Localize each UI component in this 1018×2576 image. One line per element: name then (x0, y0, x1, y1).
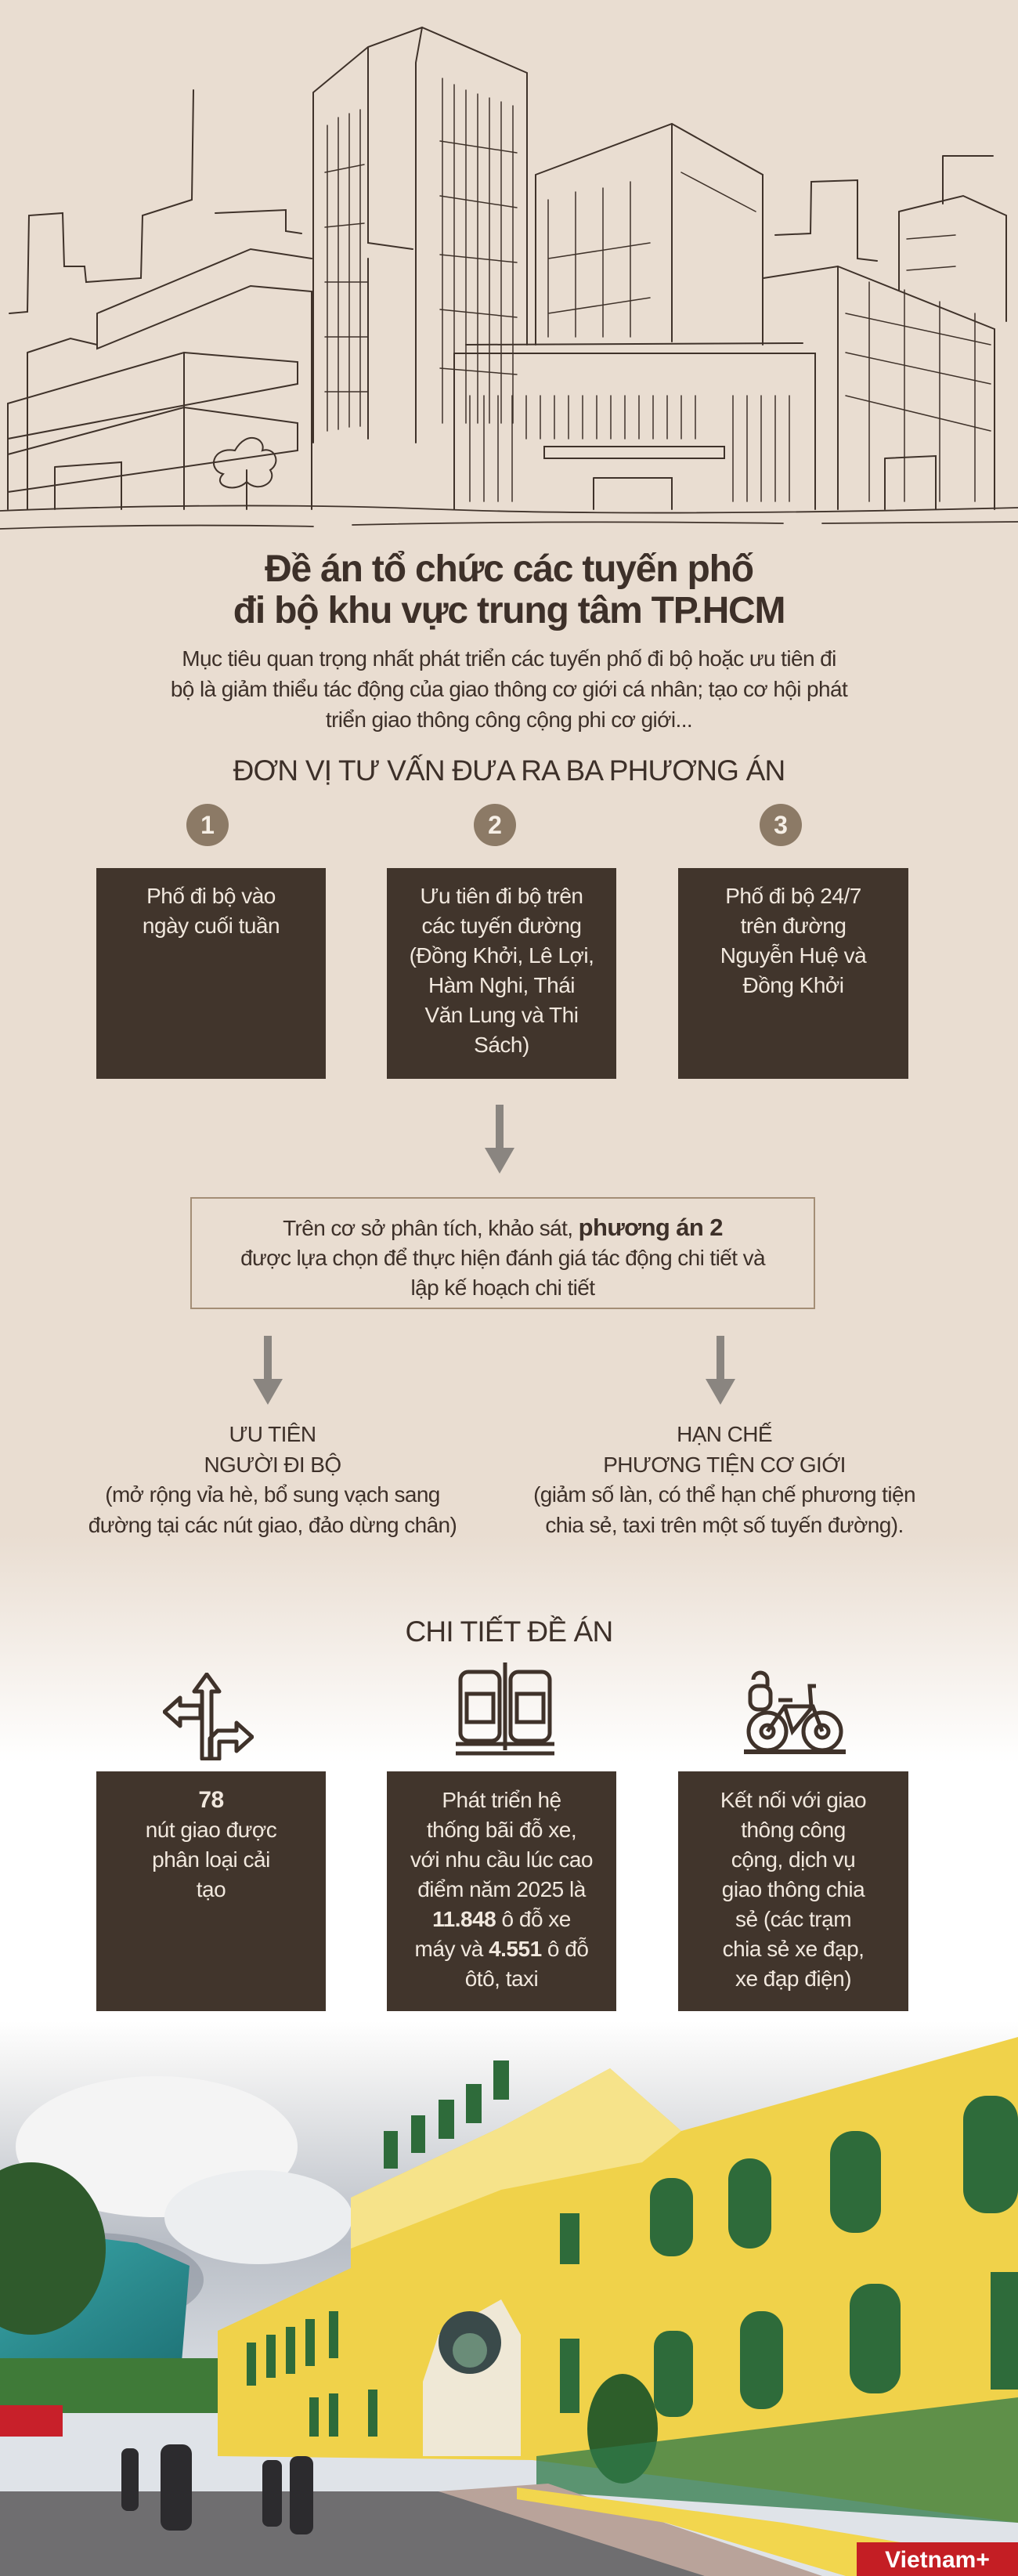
ground lines (0, 505, 1018, 529)
arrow down left (253, 1336, 283, 1405)
text: restrict vehicles: (giảm số làn, có thể hạn chế phương tiện (533, 1482, 915, 1507)
low front building (454, 343, 815, 509)
option box 3: Nguyễn Huệ và (720, 943, 866, 968)
detail box 2: với nhu cầu lúc cao (410, 1847, 593, 1872)
option box 2: Sách) (474, 1033, 529, 1057)
decision box: được lựa chọn để thực hiện đánh giá tác động chi tiết và (240, 1246, 765, 1270)
detail box 3: thông công (741, 1818, 846, 1842)
intro text: Mục tiêu quan trọng nhất phát triển các tuyến phố đi bộ hoặc ưu tiên đi (182, 646, 836, 671)
detail box 2: 11.848 ô đỗ xe (432, 1907, 571, 1931)
number 2: 2 (488, 811, 502, 839)
text: restrict vehicles: PHƯƠNG TIỆN CƠ GIỚI (603, 1453, 846, 1476)
yellow building (218, 2037, 1018, 2523)
option box 3: trên đường (741, 914, 846, 938)
detail box 1: 78 (198, 1787, 224, 1813)
title: đi bộ khu vực trung tâm TP.HCM (233, 590, 785, 631)
option box 2: Văn Lung và Thi (425, 1003, 578, 1027)
icon: parking cars (456, 1662, 554, 1755)
intro text: triển giao thông công cộng phi cơ giới... (326, 707, 692, 732)
text: restrict vehicles: chia sẻ, taxi trên một số tuyến đường). (545, 1512, 904, 1537)
number 2 (474, 804, 516, 846)
detail box 3 (678, 1771, 908, 2011)
option box 2: các tuyến đường (422, 914, 581, 938)
intro text: bộ là giảm thiểu tác động của giao thông cơ giới cá nhân; tạo cơ hội phát (171, 677, 847, 701)
detail box 3: xe đạp điện) (735, 1966, 851, 1991)
text: prioritize pedestrians: đường tại các nút giao, đảo dừng chân) (88, 1512, 457, 1537)
detail box 2: điểm năm 2025 là (417, 1877, 586, 1901)
windows (247, 2060, 1018, 2437)
logo: Vietnam+: Vietnam+ (885, 2547, 990, 2573)
text: restrict vehicles (533, 1422, 915, 1537)
arrow down right (706, 1336, 735, 1405)
option box 3 (678, 868, 908, 1079)
detail box 1: nút giao được (146, 1818, 276, 1842)
detail box 3: Kết nối với giao (720, 1788, 866, 1812)
icon: bicycle with lock (744, 1670, 846, 1754)
text: restrict vehicles: HẠN CHẾ (677, 1422, 772, 1446)
decision box: lập kế hoạch chi tiết (411, 1275, 594, 1300)
option box 2 (387, 868, 616, 1079)
people (121, 2444, 313, 2534)
option box 1 (96, 868, 326, 1079)
text: prioritize pedestrians (88, 1422, 457, 1537)
option box 1: ngày cuối tuần (143, 914, 280, 938)
glass tower (0, 2237, 190, 2362)
background skyline (9, 90, 301, 313)
detail box 1: tạo (197, 1877, 226, 1901)
option box 3: Phố đi bộ 24/7 (725, 884, 861, 908)
detail box 1 (96, 1771, 326, 2011)
number 3: 3 (774, 811, 788, 839)
text: prioritize pedestrians: NGƯỜI ĐI BỘ (204, 1453, 341, 1476)
ground (0, 2491, 705, 2576)
text: prioritize pedestrians: (mở rộng vỉa hè, bổ sung vạch sang (105, 1482, 440, 1507)
arrow down center (485, 1105, 514, 1174)
detail box 2: thống bãi đỗ xe, (427, 1818, 576, 1842)
detail box 3: chia sẻ xe đạp, (723, 1937, 864, 1961)
trees left (0, 2162, 106, 2335)
number 3 (760, 804, 802, 846)
photo: Saigon Central Post Office (0, 2037, 1018, 2576)
right buildings (764, 196, 1006, 509)
detail box 2 (387, 1771, 616, 2011)
text: prioritize pedestrians: ƯU TIÊN (229, 1422, 316, 1446)
bush (587, 2374, 658, 2484)
number 1 (186, 804, 229, 846)
detail box 1: phân loại cải (152, 1847, 270, 1872)
main tall tower (313, 27, 527, 443)
logo: Vietnam+ (857, 2542, 1018, 2576)
tree (214, 438, 276, 509)
number 1: 1 (200, 811, 215, 839)
option box 2: Ưu tiên đi bộ trên (421, 884, 583, 908)
option box 2: (Đồng Khởi, Lê Lợi, (410, 943, 594, 968)
option box 2: Hàm Nghi, Thái (428, 973, 575, 997)
detail box 2: ôtô, taxi (465, 1966, 538, 1991)
sketch: city buildings (0, 27, 1018, 530)
detail box 2: máy và 4.551 ô đỗ (415, 1937, 588, 1961)
option box 1: Phố đi bộ vào (146, 884, 276, 908)
left buildings (8, 249, 312, 509)
fence (536, 2397, 1018, 2523)
title: Đề án tổ chức các tuyến phố (265, 548, 753, 590)
intro text (171, 646, 848, 732)
heading: project details: CHI TIẾT ĐỀ ÁN (406, 1615, 612, 1648)
detail box 3: giao thông chia (722, 1877, 865, 1901)
detail box 3: cộng, dịch vụ (731, 1847, 855, 1872)
option box 3: Đồng Khởi (742, 973, 844, 997)
detail box 2: Phát triển hệ (442, 1788, 561, 1812)
icon: intersection arrows (163, 1673, 254, 1760)
heading: three options: ĐƠN VỊ TƯ VẤN ĐƯA RA BA PHƯƠNG ÁN (233, 754, 785, 787)
decision box (190, 1197, 815, 1309)
decision box: Trên cơ sở phân tích, khảo sát, phương án 2 (283, 1214, 723, 1241)
detail box 3: sẻ (các trạm (735, 1907, 851, 1931)
title (233, 548, 785, 631)
middle tower (536, 124, 763, 345)
